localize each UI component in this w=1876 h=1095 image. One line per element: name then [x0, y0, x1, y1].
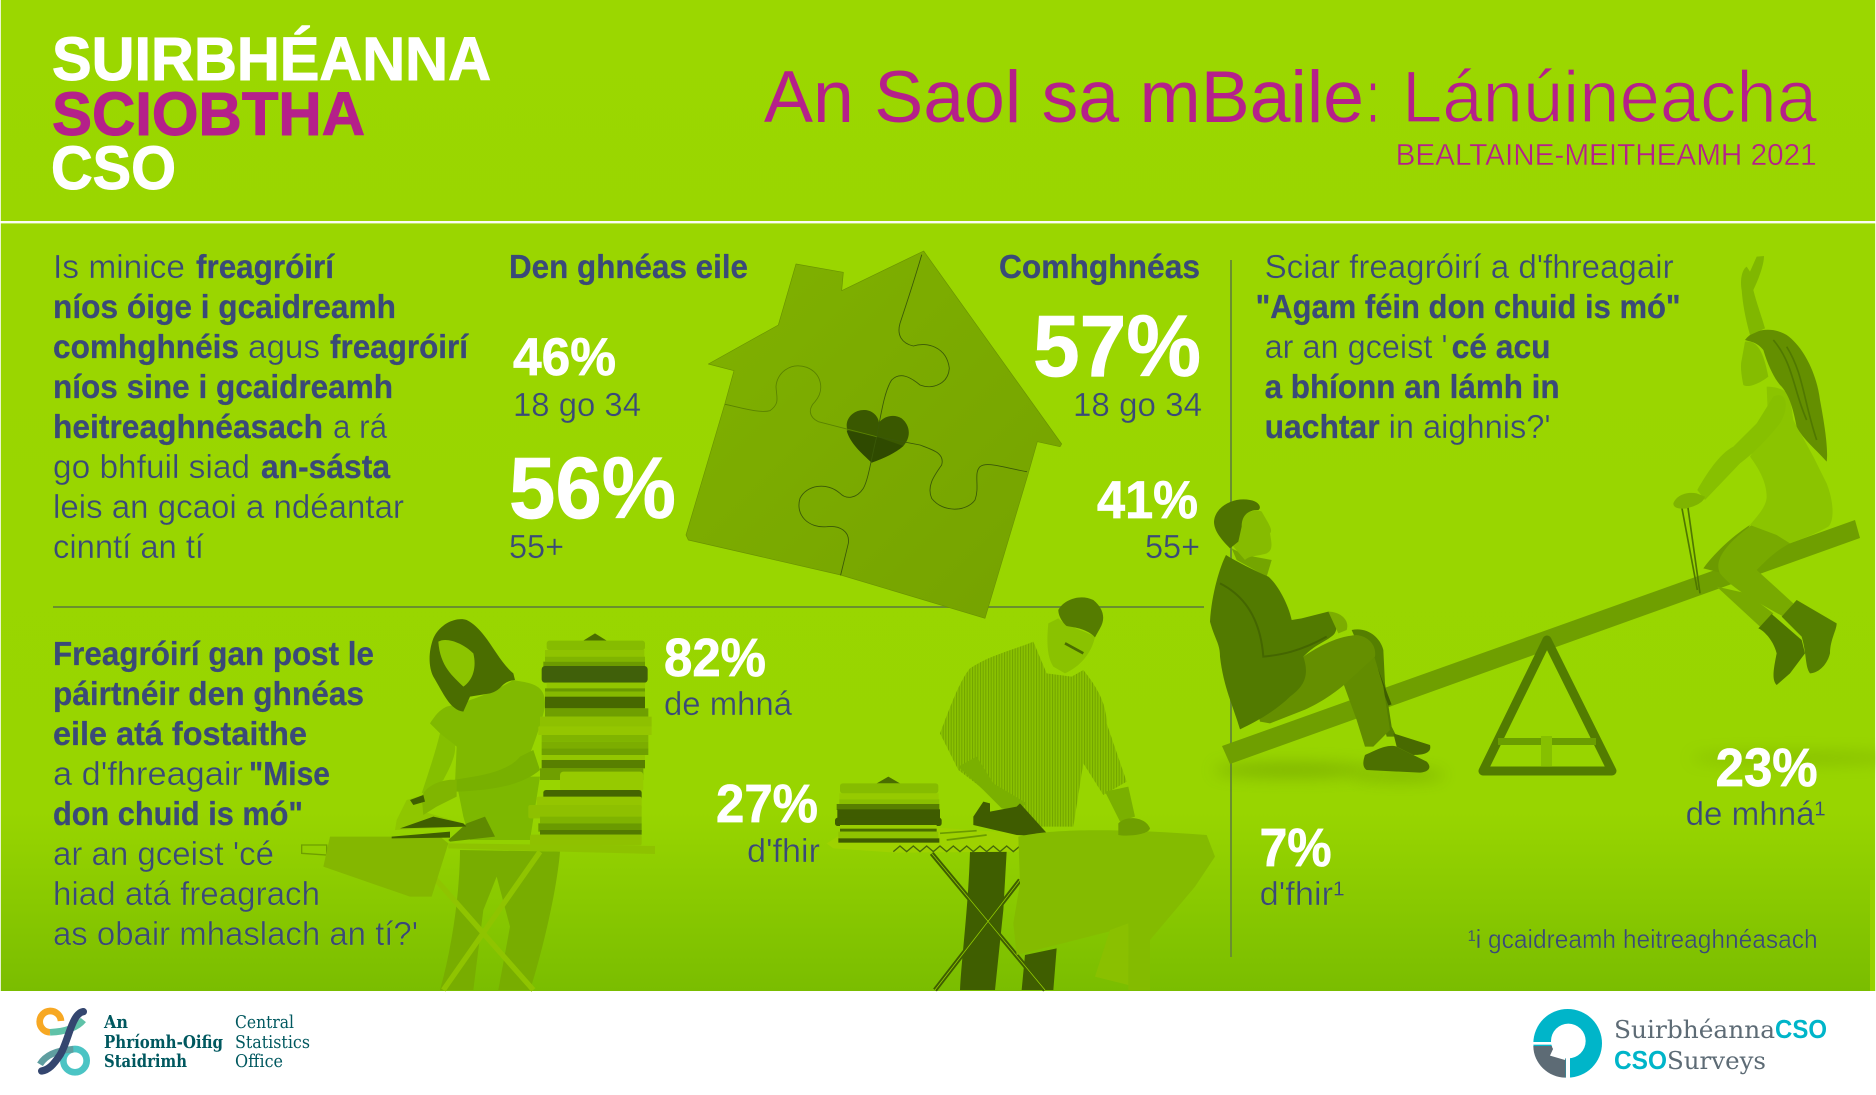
stats: Comhghnéas: 18 go 34: [1073, 387, 1202, 424]
text block: who has the upper hand: cé acu: [1452, 329, 1551, 366]
text block: decision satisfaction: go bhfuil siad: [53, 449, 250, 486]
heading: An Saol sa mBaile: Lánúineacha: [764, 57, 1817, 138]
footer: CSO logo: Statistics: [235, 1032, 310, 1053]
text block: housework: Freagróirí gan post le: [53, 636, 374, 673]
footer: CSO logo: An: [103, 1012, 128, 1033]
text block: who has the upper hand: "Agam féin don chuid is mó": [1256, 289, 1681, 326]
icon: CSO knot mark: [40, 1011, 87, 1072]
text block: decision satisfaction: comhghnéis: [53, 329, 239, 366]
header: survey title: SUIRBHÉANNA: [52, 25, 491, 93]
text block: who has the upper hand: [1256, 249, 1681, 446]
footer: CSO Surveys logo: CSO: [1614, 1045, 1667, 1075]
stat: 7% d'fhir: [1260, 818, 1345, 913]
text block: housework: eile atá fostaithe: [53, 716, 307, 753]
text block: housework: don chuid is mó": [53, 796, 303, 833]
stats: Den ghnéas eile: Den ghnéas eile: [509, 249, 748, 286]
stat: 27% d'fhir: [716, 774, 820, 870]
text block: decision satisfaction: níos sine i gcaidreamh: [53, 369, 393, 406]
text block: who has the upper hand: ar an gceist ': [1265, 329, 1448, 366]
illustration: woman ironing with tall stack of clothes: [302, 619, 655, 990]
illustration: puzzle house: [686, 251, 1062, 618]
text block: decision satisfaction: cinntí an tí: [53, 529, 205, 566]
stat: 23% de mhná: [1686, 738, 1826, 833]
stats: Comhghnéas: 41%: [1097, 471, 1198, 530]
text block: housework: as obair mhaslach an tí?': [53, 916, 418, 953]
stat: 27% d'fhir: d'fhir: [747, 833, 820, 870]
text block: who has the upper hand: a bhíonn an lámh in: [1265, 369, 1560, 406]
header: survey title: SCIOBTHA: [52, 80, 365, 148]
heading: An Saol sa mBaile: Lánúineacha: An Saol sa mBaile: [764, 57, 1364, 138]
stat: 82% de mhná: de mhná: [664, 686, 792, 723]
text block: decision satisfaction: níos óige i gcaidreamh: [53, 289, 396, 326]
footer: CSO logo: Office: [235, 1051, 283, 1072]
stats: Comhghnéas: 57%: [1033, 298, 1201, 395]
text block: decision satisfaction: [53, 249, 470, 566]
footer: CSO Surveys logo: Surveys: [1667, 1047, 1766, 1075]
stats: Den ghnéas eile: [509, 249, 748, 566]
footer: CSO logo: Phríomh-Oifig: [104, 1032, 223, 1053]
footer: CSO logo: Staidrimh: [104, 1051, 187, 1072]
heading: An Saol sa mBaile: Lánúineacha: :: [1366, 57, 1380, 138]
illustration: man on seesaw: [1210, 499, 1430, 773]
stat: 23% de mhná: de mhná¹: [1686, 796, 1826, 833]
text block: who has the upper hand: uachtar: [1265, 409, 1380, 446]
text block: who has the upper hand: Sciar freagróirí a d'fhreagair: [1265, 249, 1674, 286]
footer: CSO logo: [40, 1011, 310, 1072]
stat: 27% d'fhir: 27%: [716, 774, 818, 834]
stat: 82% de mhná: [664, 628, 792, 723]
illustration: man ironing with small stack of clothes: [827, 597, 1215, 990]
illustration: woman on seesaw: [1673, 256, 1837, 685]
text block: decision satisfaction: Is minice: [53, 249, 185, 286]
header: survey title: CSO: [51, 134, 176, 202]
text block: housework: "Mise: [249, 756, 330, 793]
text block: who has the upper hand: in aighnis?': [1389, 409, 1551, 446]
text block: decision satisfaction: freagróirí: [196, 249, 336, 286]
text block: housework: [53, 636, 418, 953]
icon: speech bubble ring: [1532, 1009, 1602, 1079]
stats: Den ghnéas eile: 56%: [509, 440, 676, 537]
text block: decision satisfaction: a rá: [333, 409, 387, 446]
footer: CSO Surveys logo: [1532, 1009, 1827, 1079]
text block: decision satisfaction: an-sásta: [261, 449, 390, 486]
stats: Den ghnéas eile: 55+: [509, 529, 564, 566]
heading: An Saol sa mBaile: Lánúineacha: Lánúineacha: [1402, 57, 1817, 138]
text block: housework: páirtnéir den ghnéas: [53, 676, 364, 713]
text block: decision satisfaction: heitreaghnéasach: [53, 409, 323, 446]
stats: Comhghnéas: Comhghnéas: [999, 249, 1200, 286]
footer: CSO Surveys logo: CSO: [1775, 1014, 1827, 1044]
stat: 7% d'fhir: 7%: [1260, 818, 1332, 878]
header: survey title: [51, 25, 491, 202]
date subtitle: BEALTAINE-MEITHEAMH 2021: [1396, 137, 1817, 172]
stats: Den ghnéas eile: 18 go 34: [513, 387, 641, 424]
stats: Comhghnéas: [999, 249, 1202, 566]
text block: decision satisfaction: freagróirí: [330, 329, 470, 366]
text block: housework: a d'fhreagair: [53, 756, 243, 793]
stats: Comhghnéas: 55+: [1145, 529, 1200, 566]
text block: decision satisfaction: agus: [248, 329, 320, 366]
footer: CSO Surveys logo: Suirbhéanna: [1614, 1016, 1775, 1044]
text block: housework: hiad atá freagrach: [53, 876, 320, 913]
stat: 23% de mhná: 23%: [1716, 738, 1818, 798]
text block: housework: ar an gceist 'cé: [53, 836, 274, 873]
stat: 82% de mhná: 82%: [664, 628, 766, 688]
stats: Den ghnéas eile: 46%: [513, 328, 616, 387]
footnote: ¹i gcaidreamh heitreaghnéasach: [1468, 924, 1818, 954]
footer: CSO logo: Central: [235, 1012, 294, 1033]
text block: decision satisfaction: leis an gcaoi a ndéantar: [53, 489, 404, 526]
illustration: seesaw: [1214, 520, 1876, 780]
stat: 7% d'fhir: d'fhir¹: [1260, 876, 1345, 913]
